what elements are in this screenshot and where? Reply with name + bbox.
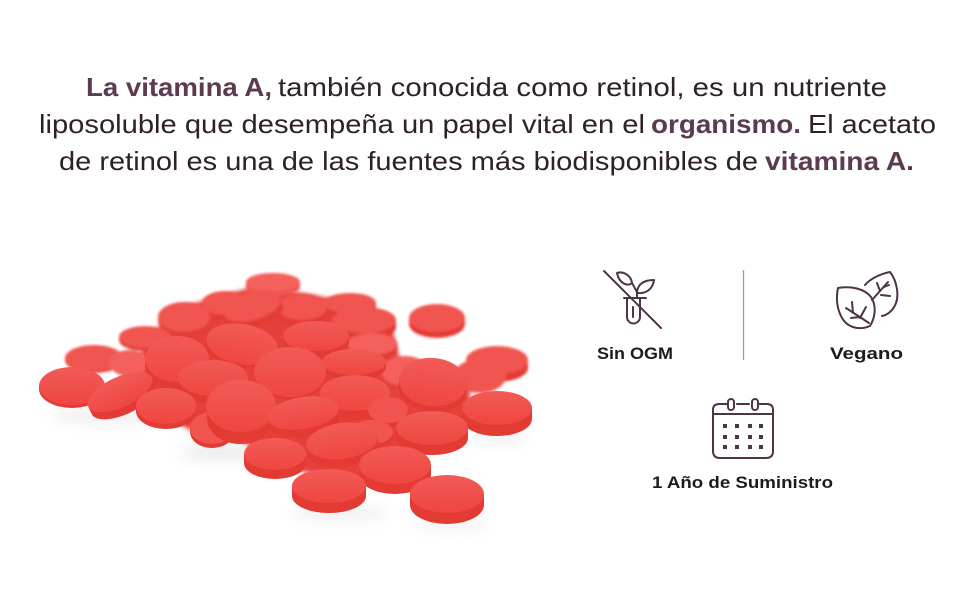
label: 1 Año de Suministro: 1 Año de Suministro [652,473,833,492]
label: Sin OGM: Sin OGM [597,344,673,363]
intro paragraph [39,72,936,176]
badge: Vegano [830,272,903,363]
icon: two leaves [837,272,897,328]
intro paragraph: organismo. [651,109,801,139]
badge: Sin OGM [597,271,673,363]
intro paragraph: también conocida como retinol, es un nutriente [278,72,887,102]
label: Vegano: Vegano [830,344,903,363]
dense red underlayer of the pile [120,285,470,480]
badge: 1 Año de Suministro [652,399,833,492]
intro paragraph: vitamina A. [765,146,914,176]
divider line [742,270,744,360]
intro paragraph: El acetato [808,109,936,139]
intro paragraph: de retinol es una de las fuentes más biodisponibles de [59,146,758,176]
icon: crossed-out plant in test tube [604,271,661,328]
icon: calendar [713,399,773,458]
photo: pile of red vitamin tablets [39,273,532,528]
intro paragraph: liposoluble que desempeña un papel vital en el [39,109,645,139]
intro paragraph: La vitamina A, [86,72,272,102]
